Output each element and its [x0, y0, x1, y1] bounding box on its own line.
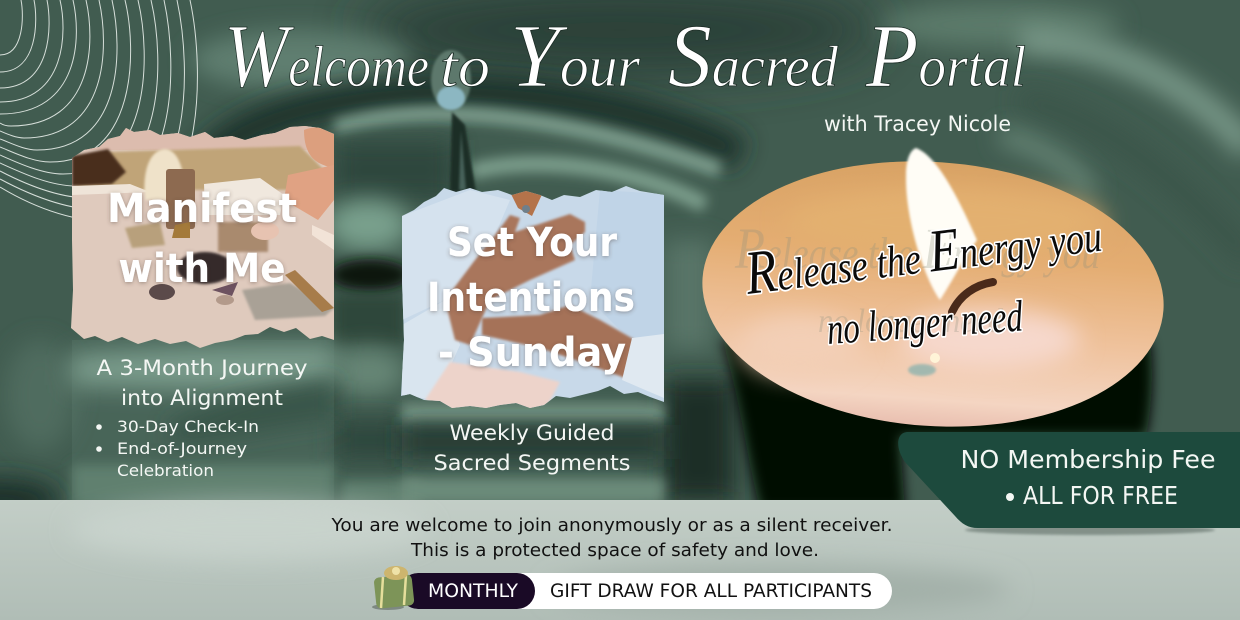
candle dish	[693, 146, 1173, 442]
candle shadow	[722, 340, 1152, 510]
translucent column	[72, 340, 334, 500]
white pill	[400, 573, 892, 609]
wick	[952, 282, 993, 312]
subheading: A 3-Month Journey	[96, 356, 308, 380]
water drop	[431, 50, 476, 192]
main text: Release the Energy you	[741, 197, 1105, 308]
bullet list	[96, 417, 259, 480]
badge: no membership fee	[898, 432, 1240, 535]
ghost text	[734, 216, 1100, 340]
ghost text: Release the Energy you	[734, 216, 1100, 281]
gift draw pill: GIFT DRAW FOR ALL PARTICIPANTS	[550, 580, 872, 602]
decorative line arcs	[0, 0, 197, 222]
main text: no longer need	[825, 291, 1025, 354]
heading: - Sunday	[438, 330, 626, 376]
translucent column	[402, 400, 664, 500]
title	[224, 7, 1026, 106]
panel: manifest with me	[70, 125, 336, 500]
subtitle: with Tracey Nicole	[824, 112, 1011, 136]
panel: set your intentions	[400, 185, 666, 500]
heading	[427, 220, 635, 376]
gift draw pill	[372, 566, 892, 610]
subheading: into Alignment	[121, 386, 283, 410]
title: Your	[510, 7, 640, 106]
bullet list: Celebration	[117, 461, 214, 480]
welcome message: This is a protected space of safety and love.	[410, 540, 819, 561]
title: to	[440, 34, 490, 99]
heading: with Me	[118, 246, 286, 292]
welcome message	[330, 515, 892, 561]
tea light candle	[693, 146, 1173, 510]
flame	[906, 148, 977, 300]
photo: altar with candle and crystals	[70, 125, 336, 350]
bottom band	[0, 500, 1240, 620]
subheading	[434, 421, 630, 475]
bullet list: 30-Day Check-In	[117, 417, 259, 436]
bullet list: End-of-Journey	[117, 439, 247, 458]
subheading: Sacred Segments	[434, 451, 630, 475]
badge shadow	[965, 525, 1215, 535]
title: Welcome	[224, 7, 429, 106]
title: Portal	[865, 7, 1026, 106]
badge text: NO Membership Fee	[960, 445, 1216, 474]
pill labels: MONTHLY	[428, 580, 518, 602]
heading	[107, 186, 297, 292]
heading: Intentions	[427, 275, 635, 321]
badge text	[960, 445, 1216, 510]
heading: Manifest	[107, 186, 297, 232]
welcome message: You are welcome to join anonymously or as a silent receiver.	[330, 515, 892, 536]
main text	[741, 197, 1105, 354]
title: Sacred	[668, 7, 839, 106]
ghost text: no longer need	[818, 303, 1004, 340]
badge text: ALL FOR FREE	[1023, 481, 1178, 510]
photo: hands on heart	[400, 185, 666, 412]
icon: gift box	[372, 566, 415, 610]
monthly pill	[400, 573, 535, 609]
heading: Set Your	[447, 220, 617, 266]
badge shape	[898, 432, 1240, 528]
script quote: release the energy	[734, 197, 1105, 354]
subheading: Weekly Guided	[450, 421, 614, 445]
subheading	[96, 356, 308, 410]
